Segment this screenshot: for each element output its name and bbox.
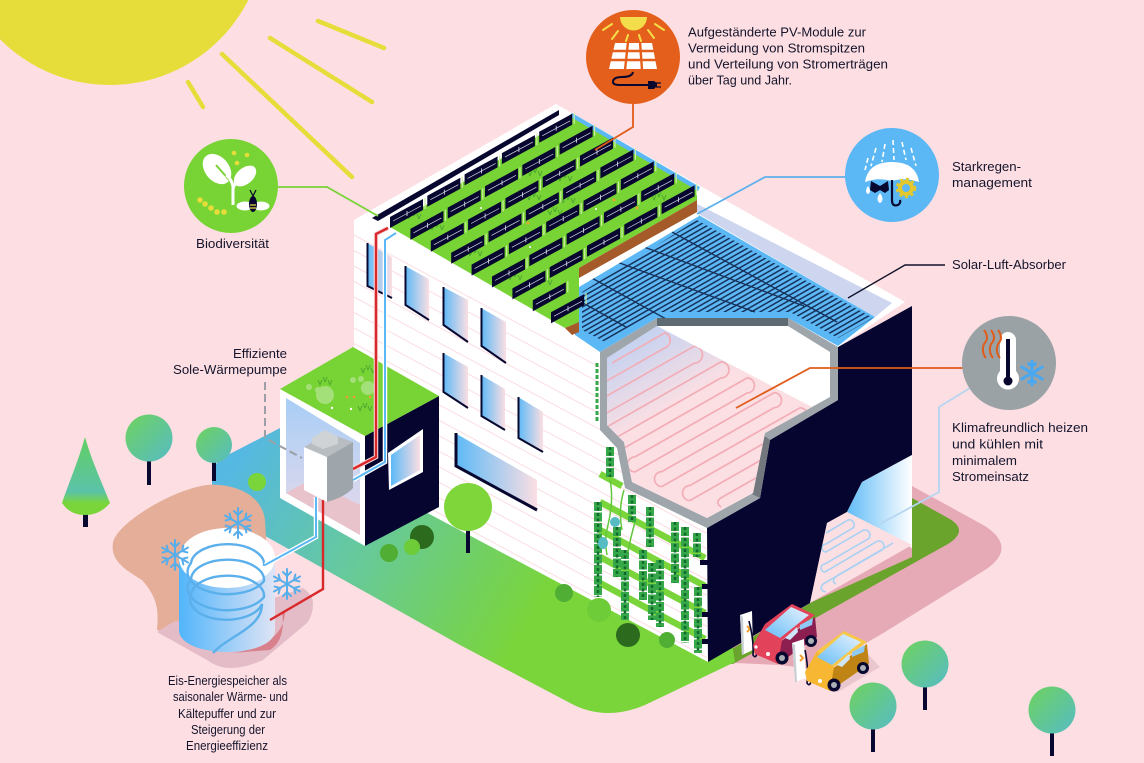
windows <box>367 243 543 512</box>
text: climate: Klimafreundlich heizen <box>952 420 1088 435</box>
text: ice storage: Eis-Energiespeicher als <box>168 673 287 688</box>
underfloor heating coil <box>607 332 806 508</box>
coil <box>188 544 264 653</box>
sun rays <box>188 21 384 177</box>
building facade <box>354 220 708 662</box>
bushes <box>248 473 675 648</box>
text: Starkregenmanagement <box>952 159 1032 190</box>
yellow car shadow <box>830 652 880 692</box>
yellow car <box>805 631 869 692</box>
dashed leader: heat pump <box>265 382 302 458</box>
absorber base <box>575 214 875 352</box>
text: ice storage <box>168 673 288 753</box>
conifer <box>62 437 110 527</box>
notch recess <box>810 455 912 603</box>
red car <box>753 604 817 664</box>
text: ice storage: Energieeffizienz <box>186 738 268 753</box>
ground: garden gradient <box>212 400 735 713</box>
annex navy wall <box>365 396 439 546</box>
green facade with vines <box>597 363 708 653</box>
icon: biodiversity <box>184 139 278 233</box>
heat pump <box>304 430 353 502</box>
text: ice storage: saisonaler Wärme- und <box>173 689 288 704</box>
solar air absorber <box>582 220 873 342</box>
annex window <box>388 429 423 490</box>
green roof <box>390 115 697 328</box>
text: PV modules: Vermeidung von Stromspitzen <box>688 40 865 56</box>
annex recess <box>286 398 360 535</box>
text: PV modules: und Verteilung von Stromerträgen <box>688 56 888 72</box>
tree in front <box>444 483 492 553</box>
text: climate: minimalem <box>952 453 1017 468</box>
text: climate: und kühlen mit <box>952 436 1043 452</box>
charging station 2 <box>792 639 814 685</box>
floor <box>607 326 812 518</box>
roof water strip <box>569 113 700 191</box>
navy tabs <box>700 560 708 644</box>
roof side strip <box>697 204 892 317</box>
annex side wall <box>280 389 365 546</box>
ice storage pit <box>113 485 313 668</box>
text: PV modules <box>688 24 888 88</box>
grass marks <box>407 168 666 285</box>
tree <box>850 682 896 752</box>
annex green roof <box>280 347 439 436</box>
leader lines <box>275 100 970 524</box>
ice storage tank <box>179 528 275 653</box>
text: heat pump: Sole-Wärmepumpe <box>173 362 287 377</box>
charging station 1 <box>740 611 761 657</box>
text: Solar-Luft-Absorber: Solar-Luft-Absorber <box>952 257 1067 272</box>
trees left <box>62 414 232 527</box>
text: ice storage: Kältepuffer und zur <box>178 706 277 721</box>
soil <box>579 200 697 278</box>
ground: dark green strip <box>708 498 959 664</box>
text: Starkregenmanagement: Starkregen- <box>952 159 1021 174</box>
trees right <box>850 640 1076 756</box>
icon: solar panel <box>586 10 680 104</box>
tree small <box>196 427 232 481</box>
pipes <box>265 228 396 620</box>
roof plants <box>306 365 375 411</box>
cutaway section <box>593 318 838 528</box>
icon: umbrella and rain <box>845 128 939 222</box>
text: climate: Stromeinsatz <box>952 469 1029 484</box>
annex <box>280 347 439 546</box>
tree <box>126 414 172 485</box>
text: ice storage: Steigerung der <box>191 722 266 737</box>
planter bars <box>600 474 705 639</box>
navy end wall <box>707 306 912 662</box>
snowflakes <box>160 508 302 599</box>
text: Biodiversität: Biodiversität <box>196 236 269 251</box>
sun <box>0 0 384 177</box>
text: climate <box>952 420 1088 484</box>
text: heat pump <box>173 346 287 377</box>
roof <box>354 104 905 353</box>
white strip <box>579 211 699 287</box>
tree <box>902 640 948 710</box>
text: PV modules: über Tag und Jahr. <box>688 72 792 88</box>
icon: thermometer <box>962 316 1056 410</box>
vines <box>598 447 698 653</box>
text: heat pump: Effiziente <box>233 346 287 361</box>
text: Starkregenmanagement: management <box>952 175 1032 190</box>
ground: pink path <box>708 486 1002 670</box>
PV modules <box>372 110 697 323</box>
tree <box>1028 686 1076 756</box>
text: PV modules: Aufgeständerte PV-Module zur <box>688 24 867 40</box>
